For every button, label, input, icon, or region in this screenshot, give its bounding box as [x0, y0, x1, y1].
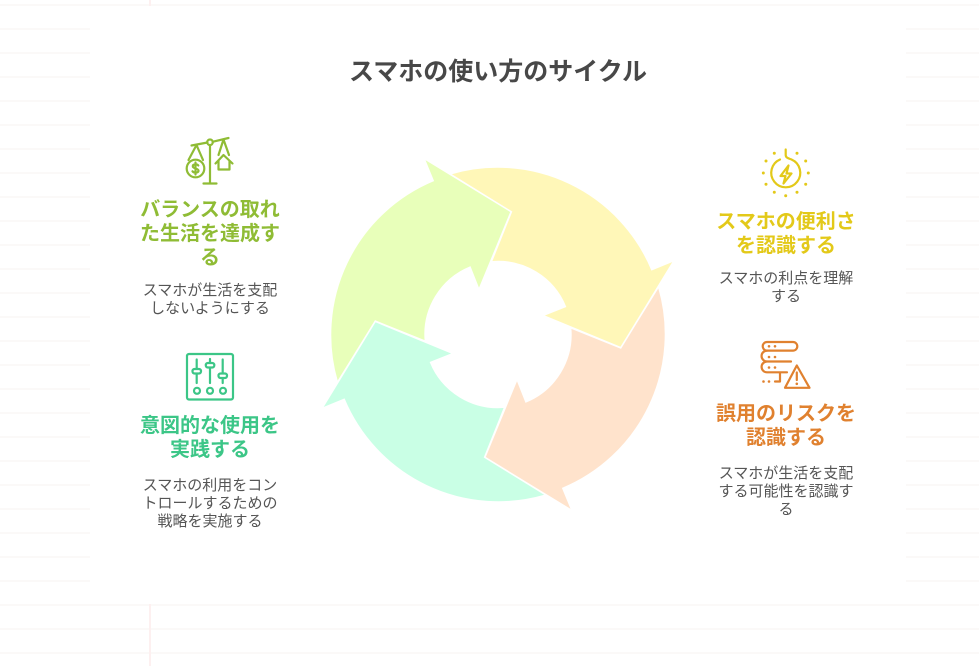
heading: balance: バランスの取れ — [140, 199, 280, 221]
heading: misuse: 誤用のリスクを — [716, 403, 856, 425]
text: intentional use — [142, 477, 278, 530]
text: intentional use: 戦略を実施する — [157, 513, 262, 530]
arrow: peach — [485, 287, 665, 510]
heading: misuse: 認識する — [746, 427, 826, 449]
text: intentional use: スマホの利用をコン — [143, 477, 277, 494]
heading: balance: た生活を達成す — [140, 223, 280, 245]
arrow: lime — [331, 159, 511, 382]
heading: intentional use: 実践する — [170, 439, 250, 461]
text: intentional use: トロールするための — [142, 495, 278, 512]
title: スマホの使い方のサイクル — [349, 58, 647, 86]
text: balance: しないようにする — [150, 300, 270, 317]
heading: intentional use — [140, 414, 280, 461]
heading: benefits — [716, 211, 856, 257]
heading: misuse — [716, 403, 856, 449]
text: benefits: する — [771, 288, 801, 305]
arrow: mint — [322, 322, 545, 502]
heading: benefits: スマホの便利さ — [716, 211, 856, 233]
text: benefits — [719, 270, 853, 305]
heading: balance — [140, 199, 280, 269]
heading: balance: る — [200, 247, 220, 269]
heading: benefits: を認識する — [736, 235, 836, 257]
text: misuse: スマホが生活を支配 — [719, 465, 853, 482]
text: balance — [143, 282, 277, 317]
text: misuse: する可能性を認識す — [718, 483, 854, 500]
arrow: yellow — [451, 167, 674, 347]
text: benefits: スマホの利点を理解 — [719, 270, 853, 287]
heading: intentional use: 意図的な使用を — [140, 415, 280, 437]
text: misuse: る — [778, 501, 794, 518]
text: misuse — [718, 465, 854, 518]
text: balance: スマホが生活を支配 — [143, 282, 277, 299]
